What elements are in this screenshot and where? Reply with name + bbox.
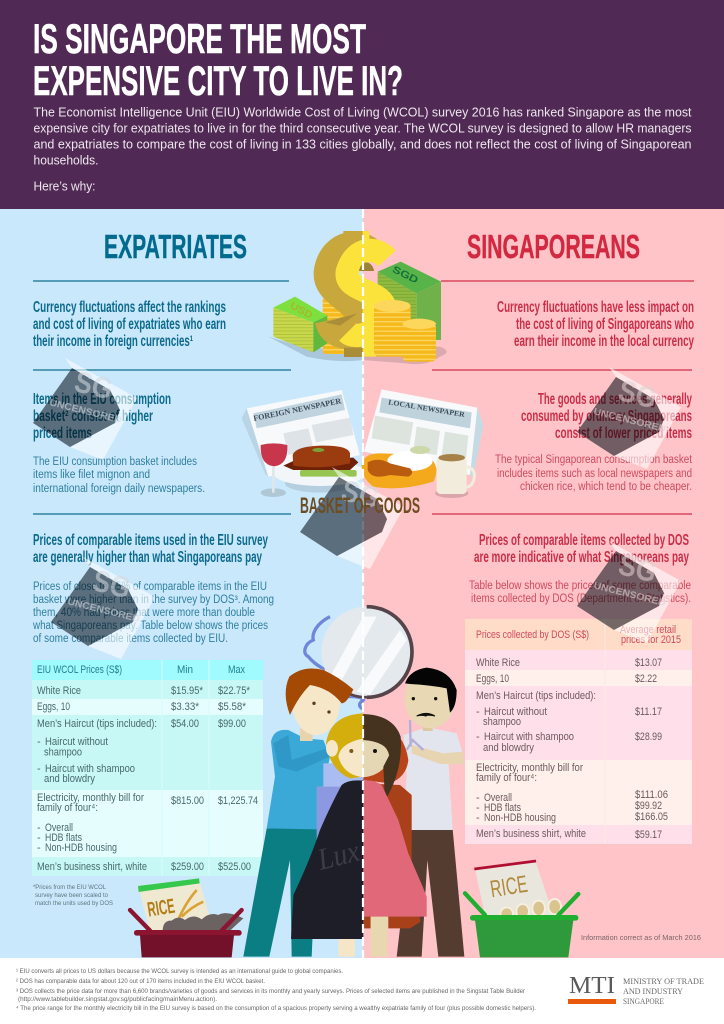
table: EIU WCOL prices: $99.00 [218,718,246,730]
MTI logo: SINGAPORE [623,997,664,1006]
table: EIU WCOL prices: $1,225.74 [218,795,258,807]
table: DOS prices: $59.17 [635,829,662,841]
watermark stamp: singaporeans prices: UNCENSORED [592,580,667,609]
watermark stamp: singaporeans prices: SG [615,548,660,590]
text block: items expatriates: Items in the EIU consumption [33,391,171,408]
table: DOS prices: $28.99 [635,731,662,743]
illustration: foreign newspaper meal [242,390,367,497]
table: DOS prices: $2.22 [635,673,657,685]
background: singaporeans side [363,209,724,958]
header panel [0,0,724,209]
table: DOS prices: $13.07 [635,657,662,669]
table: DOS prices: Haircut with shampoo [484,731,574,743]
table: DOS prices: Overall [484,792,512,804]
divider lines right [432,281,694,514]
text block: items singaporeans [495,391,693,493]
text block: currency singaporeans [497,299,694,350]
table note: match the units used by DOS [35,900,114,907]
text block: prices singaporeans: items collected by DOS (Department of Statistics). [471,593,691,605]
title: IS SINGAPORE THE MOST [33,15,366,62]
watermark stamp: expatriates items: UNCENSORED [48,397,123,426]
table: DOS prices: - [476,812,480,824]
table: EIU WCOL prices: - [37,822,41,834]
table: EIU WCOL prices: $15.95* [171,685,204,697]
text block: items expatriates [33,391,205,495]
text block: currency expatriates [33,299,226,350]
table: EIU WCOL prices: EIU WCOL Prices (S$) [37,664,122,676]
illustration: singaporean rice basket [465,861,578,957]
table: EIU WCOL prices: $815.00 [171,795,204,807]
watermark stamp: singaporeans prices [577,541,681,643]
text block: prices expatriates: basket were higher than in the survey by DOS³. Among [33,594,274,606]
intro text: The Economist Intelligence Unit (EIU) Worldwide Cost of Living (WCOL) survey 2016 has ranked Singapore as the most [34,104,692,120]
divider lines left [33,281,291,514]
illustration: money: USD [288,301,314,322]
watermark stamp: basket of goods: SG [338,474,383,516]
watermark stamp: singaporeans items [577,367,681,469]
table: DOS prices: - [476,802,480,814]
footnotes: (http://www.tablebuilder.singstat.gov.sg/publicfacing/mainMenu.action). [18,996,217,1003]
text block: prices expatriates: them, 40% had prices that were more than double [33,607,255,619]
info date note: Information correct as of March 2016 [581,933,701,942]
background: expatriates side [0,209,363,958]
illustration: singaporean rice basket: RICE [488,871,529,903]
table: DOS prices: Haircut without [484,706,547,718]
table: EIU WCOL prices: Eggs, 10 [37,701,70,713]
table: DOS prices: Eggs, 10 [476,673,509,685]
table: EIU WCOL prices: Non-HDB housing [45,842,117,854]
table: EIU WCOL prices: HDB flats [45,832,82,844]
illustration: expat rice basket: RICE [146,895,176,922]
text block: items expatriates: items like filet mignon and [33,469,150,481]
table: DOS prices: and blowdry [483,742,534,754]
table: EIU WCOL prices: and blowdry [44,773,95,785]
table: DOS prices: - [476,706,480,718]
table: DOS prices: - [476,792,480,804]
illustration: foreign newspaper meal: FOREIGN NEWSPAPER [253,396,342,423]
illustration: mirror [305,607,412,709]
footnotes: ⁴ The price range for the monthly electricity bill in the EIU survey is based on the consumption of a spacious property serving a wealthy expatriate family of four (plus possible domestic helpers). [16,1005,536,1012]
illustration: hairdresser expatriate [243,668,353,957]
text block: items expatriates: international foreign daily newspapers. [33,483,205,495]
MTI logo: AND INDUSTRY [623,987,683,996]
text block: prices singaporeans [469,532,691,605]
center dashed line [362,209,364,958]
table: DOS prices: $11.17 [635,706,662,718]
table: DOS prices: HDB flats [484,802,521,814]
table: EIU WCOL prices: Men’s business shirt, white [37,861,147,873]
illustration: money: SGD [390,264,420,286]
footnotes: ³ DOS collects the price data for more than 6,600 brands/varieties of goods and services in its monthly and yearly surveys. Prices of selected items are published in the Singstat Table Builder [16,988,526,995]
footnotes [16,968,536,1012]
footnotes: ¹ EIU converts all prices to US dollars because the WCOL survey is intended as an international guide to global companies. [16,968,343,975]
text block: items expatriates: The EIU consumption basket includes [33,456,197,468]
table: DOS prices: family of four⁴: [476,772,537,784]
text block: prices expatriates: of some comparable items collected by EIU. [33,633,228,645]
text block: currency expatriates: Currency fluctuations affect the rankings [33,299,226,316]
table: DOS prices [465,619,692,844]
table: EIU WCOL prices: shampoo [44,746,82,758]
table: DOS prices: prices for 2015 [621,634,681,646]
watermark stamp: expatriates items: SG [71,365,116,407]
table: DOS prices: $166.05 [635,811,668,823]
table: DOS prices: Electricity, monthly bill for [476,762,583,774]
table: EIU WCOL prices: Haircut with shampoo [45,763,135,775]
title [33,15,403,104]
table: DOS prices: White Rice [476,657,520,669]
illustration: hairdresser singaporean [397,668,464,957]
watermark stamp: expatriates items [33,358,137,460]
text block: items singaporeans: The typical Singaporean consumption basket [495,454,693,466]
table: EIU WCOL prices: - [37,842,41,854]
illustration: seated woman: Lux [313,834,363,877]
illustration: local newspaper meal: LOCAL NEWSPAPER [388,397,466,419]
table note [33,884,114,907]
table: DOS prices: $111.06 [635,789,668,801]
watermark stamp: singaporeans items: UNCENSORED [592,406,667,435]
intro text: households. [34,152,98,168]
MTI logo [568,973,704,1006]
table: EIU WCOL prices: Electricity, monthly bill for [37,792,144,804]
footnotes: ² DOS has comparable data for about 120 out of 170 items included in the EIU WCOL basket. [16,978,265,985]
table: EIU WCOL prices: - [37,736,41,748]
watermark stamp: expatriates prices: UNCENSORED [66,596,141,625]
heading: expatriates: EXPATRIATES [104,228,247,265]
illustration: money [268,231,447,364]
watermark stamp: singaporeans items: SG [615,374,660,416]
table: EIU WCOL prices: family of four⁴: [37,802,98,814]
table: DOS prices: Men’s business shirt, white [476,828,586,840]
table: EIU WCOL prices: $525.00 [218,861,251,873]
text block: currency expatriates: their income in foreign currencies¹ [33,333,193,350]
table: DOS prices: Average retail [620,624,676,636]
text block: prices expatriates: Prices of comparable items used in the EIU survey [33,532,268,549]
table: DOS prices: shampoo [483,716,521,728]
table: EIU WCOL prices: Haircut without [45,736,108,748]
intro text: Here’s why: [34,178,96,194]
text block: prices singaporeans: Table below shows the prices of some comparable [469,580,691,592]
table: DOS prices: - [476,731,480,743]
text block: items expatriates: priced items [33,425,92,442]
table: EIU WCOL prices: $3.33* [171,701,200,713]
table: EIU WCOL prices: Overall [45,822,73,834]
table: EIU WCOL prices: $22.75* [218,685,251,697]
table: EIU WCOL prices: Min [177,664,193,676]
table: EIU WCOL prices: $54.00 [171,718,199,730]
table: EIU WCOL prices: Men’s Haircut (tips included): [37,718,157,730]
illustration: seated woman [291,713,427,957]
table: EIU WCOL prices: White Rice [37,685,81,697]
intro text [34,104,692,194]
illustration: expat rice basket [130,878,243,957]
text block: currency expatriates: and cost of living of expatriates who earn [33,316,226,333]
table: DOS prices: Prices collected by DOS (S$) [476,629,589,641]
table: DOS prices: $99.92 [635,800,662,812]
text block: items expatriates: basket² consist of higher [33,408,153,425]
intro text: and expatriates to compare the cost of living in 133 cities globally, and does not reflect the cost of living of Singaporean [34,136,692,152]
table: EIU WCOL prices [32,660,263,876]
illustration: local newspaper meal [362,389,483,498]
table: EIU WCOL prices: - [37,832,41,844]
text block: prices expatriates: what Singaporeans pay. Table below shows the prices [32,620,268,632]
table: EIU WCOL prices: $5.58* [218,701,247,713]
footer background [0,958,724,1024]
table: EIU WCOL prices: - [37,763,41,775]
text block: prices expatriates: Prices of close to 55% of comparable items in the EIU [33,581,267,593]
label: basket of goods: BASKET OF GOODS [300,493,420,518]
title: EXPENSIVE CITY TO LIVE IN? [33,57,403,104]
watermark stamp: expatriates prices [51,557,155,659]
table: DOS prices: Non-HDB housing [484,812,556,824]
table: DOS prices: Men’s Haircut (tips included): [476,690,596,702]
table: EIU WCOL prices: $259.00 [171,861,204,873]
watermark stamp: expatriates prices: SG [89,564,134,606]
table note: survey have been scaled to [35,892,108,899]
text block: items singaporeans: chicken rice, which tend to be cheaper. [520,481,692,493]
watermark stamp: basket of goods [300,467,404,569]
intro text: expensive city for expatriates to live in for the third consecutive year. The WCOL survey is designed to allow HR managers [34,120,692,136]
text block: items singaporeans: includes items such as local newspapers and [497,468,692,480]
table: EIU WCOL prices: Max [228,664,245,676]
table note: *Prices from the EIU WCOL [33,884,106,891]
text block: prices expatriates [32,532,274,645]
MTI logo: MINISTRY OF TRADE [623,977,704,986]
text block: prices expatriates: are generally higher than what Singaporeans pay [33,549,262,566]
MTI logo: MTI [569,973,615,999]
